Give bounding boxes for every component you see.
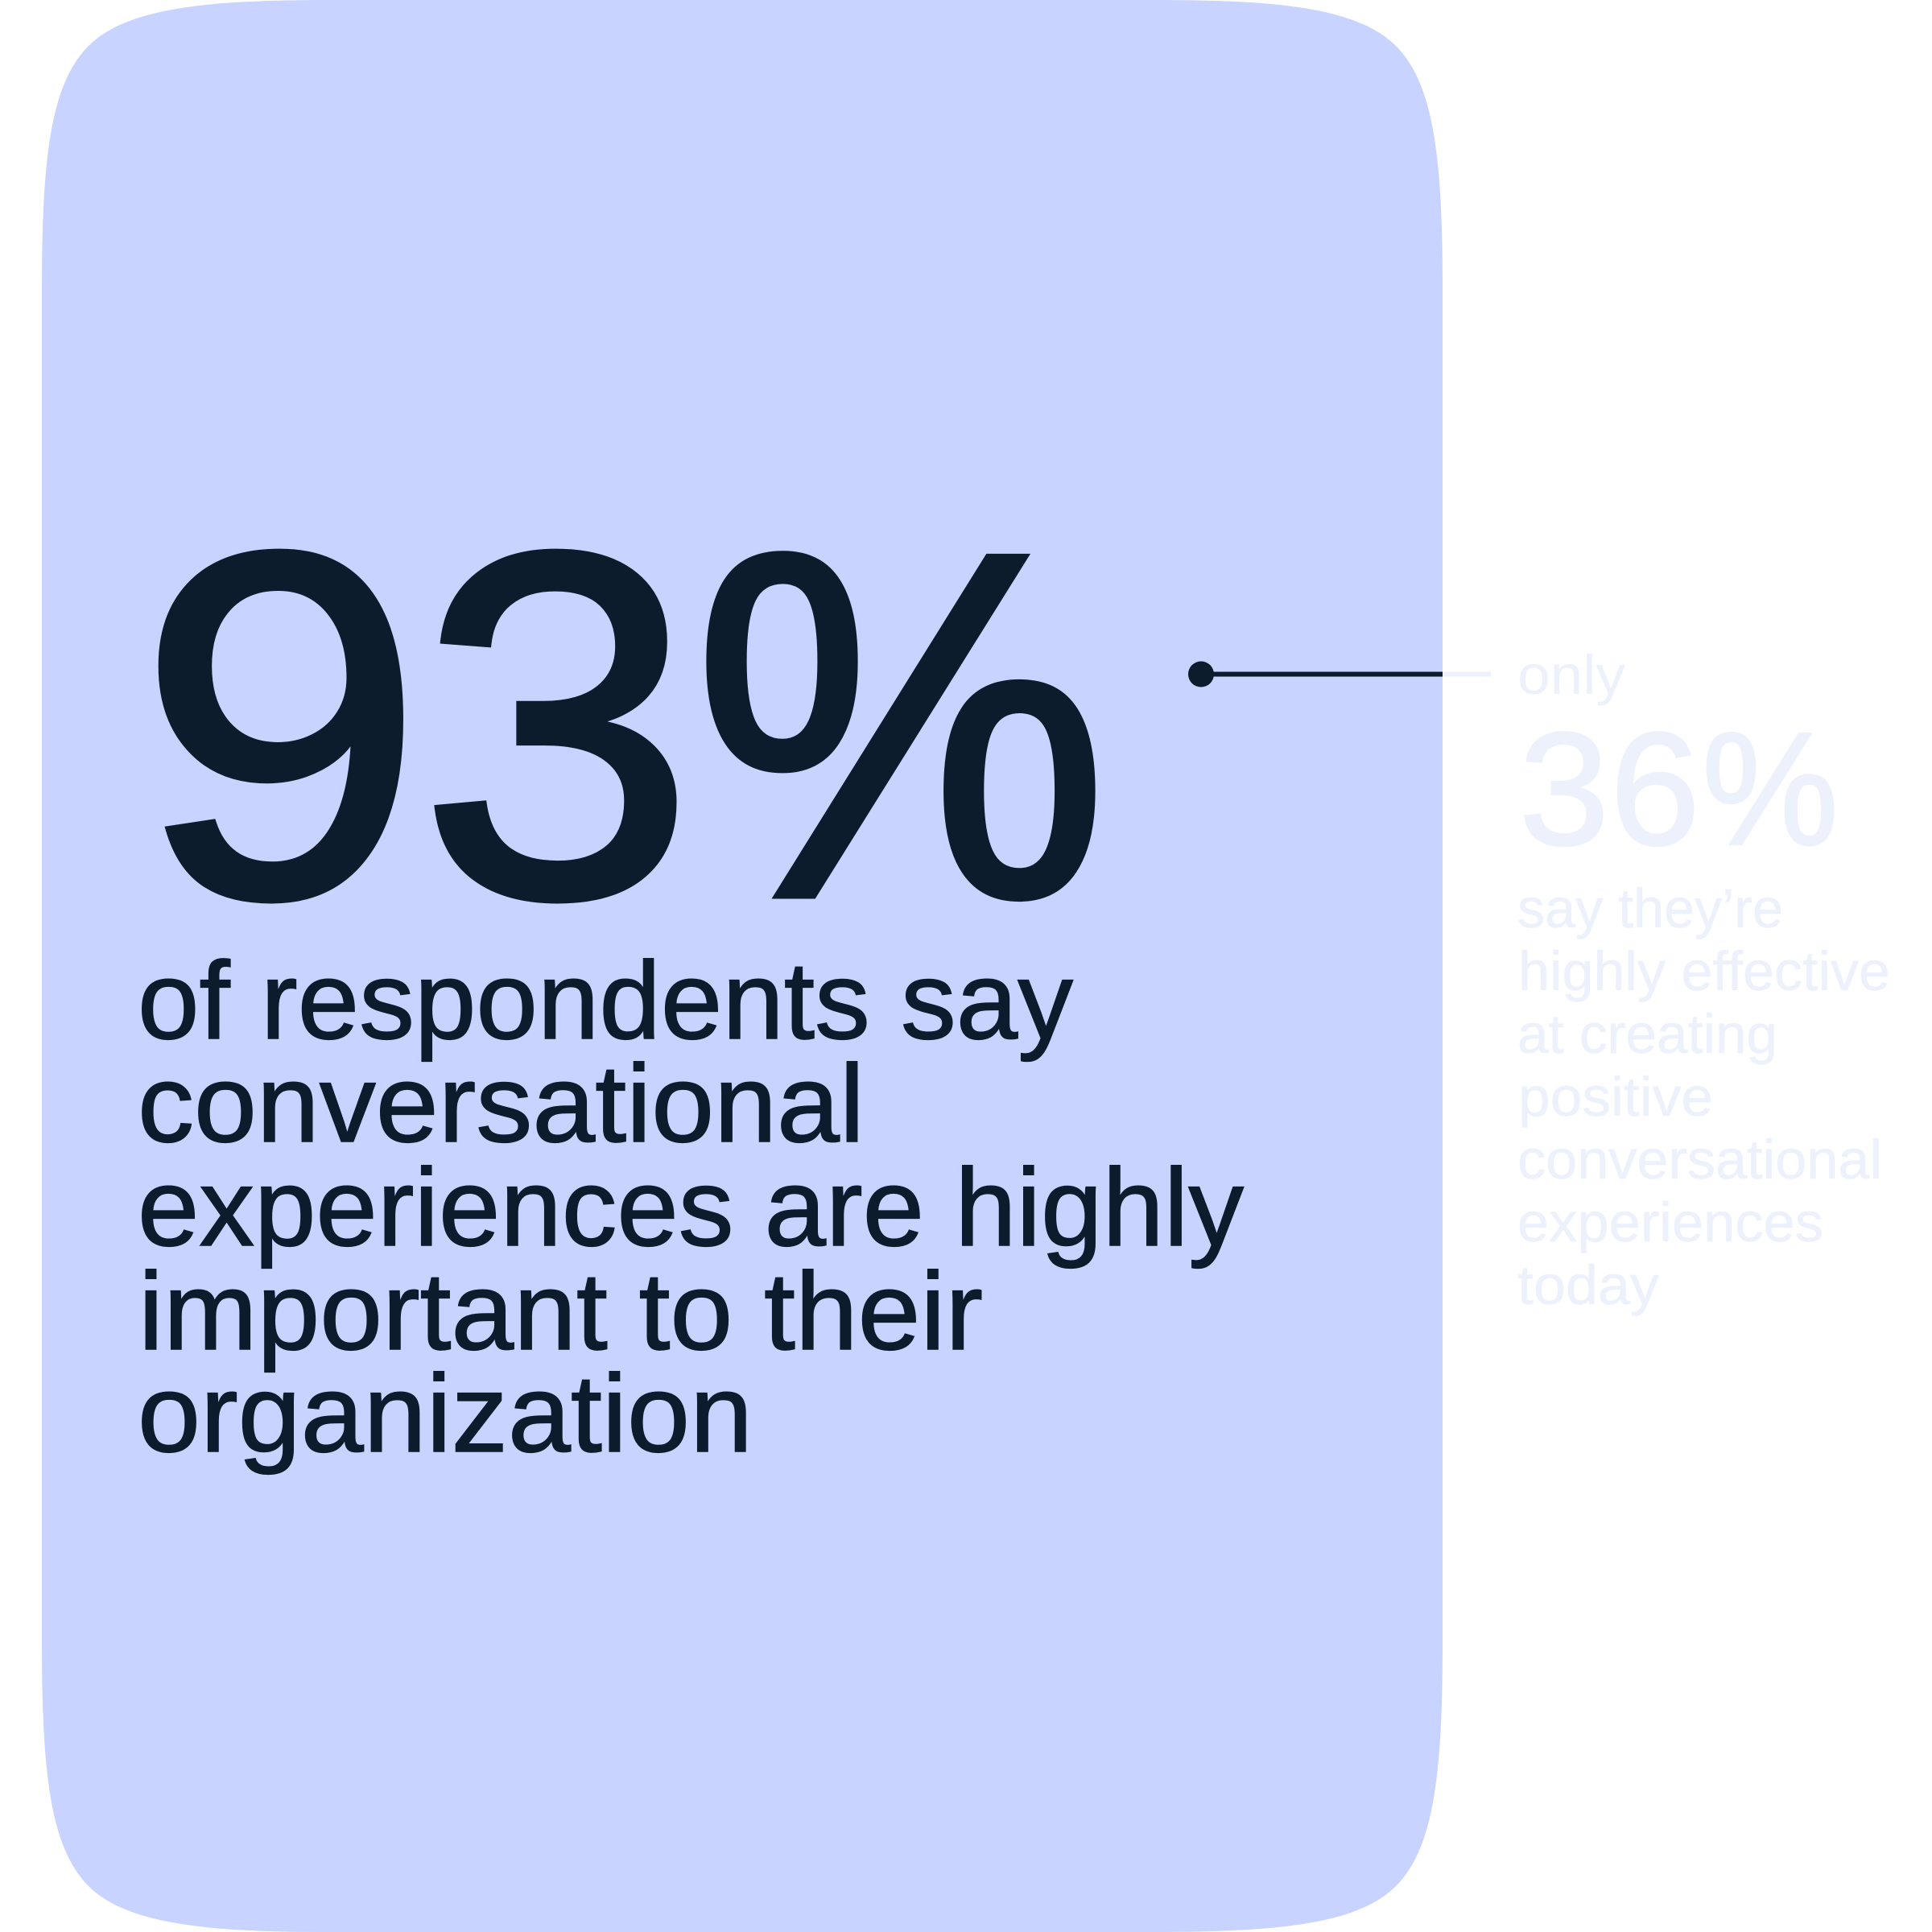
secondary description text: positive	[1518, 1066, 1713, 1128]
big statistic: 93%: 3	[419, 452, 695, 1000]
big statistic: 93%	[138, 452, 1108, 1000]
secondary description text: at creating	[1517, 1003, 1777, 1065]
secondary description text: experiences	[1517, 1191, 1823, 1253]
panel: blue rounded background	[42, 0, 1443, 1932]
big statistic: 93%: %	[693, 452, 1108, 1000]
secondary description text	[1517, 877, 1890, 1316]
main description text: of respondents say	[138, 939, 1073, 1063]
secondary description text: highly effective	[1518, 940, 1890, 1002]
connector line with dot	[1188, 662, 1491, 687]
main description text: important to their	[138, 1250, 983, 1373]
secondary statistic: 36%: %	[1702, 700, 1839, 879]
secondary label: only: only	[1517, 644, 1626, 706]
main description text: organization	[138, 1352, 753, 1476]
secondary description text: today	[1517, 1254, 1660, 1316]
secondary statistic: 36%: 6	[1610, 700, 1700, 879]
secondary statistic: 36%	[1519, 700, 1839, 879]
main description text: conversational	[138, 1042, 865, 1166]
big statistic: 93%: 9	[138, 452, 423, 1000]
secondary statistic: 36%: 3	[1519, 700, 1609, 879]
main description text: experiences are highly	[138, 1146, 1244, 1269]
secondary description text: say they’re	[1517, 877, 1783, 939]
main description text	[138, 939, 1244, 1476]
secondary description text: conversational	[1517, 1129, 1882, 1191]
